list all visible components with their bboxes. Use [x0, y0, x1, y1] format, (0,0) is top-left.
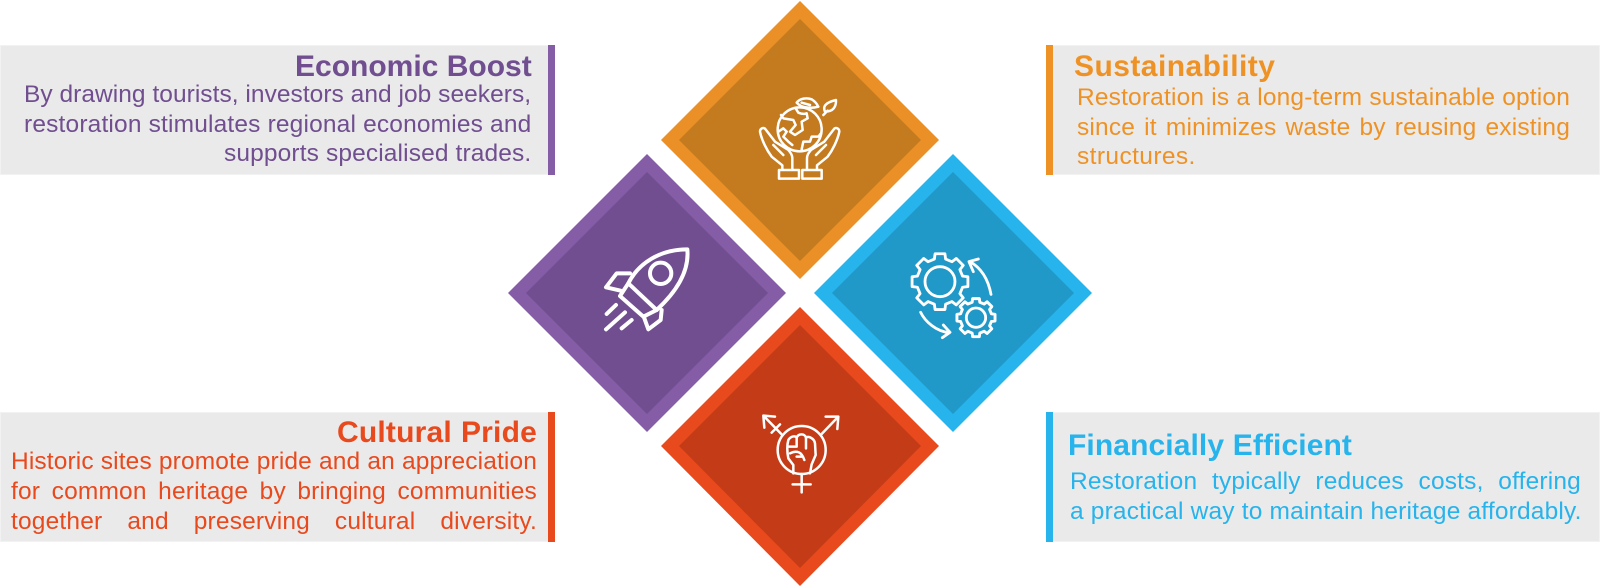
- text block: sustainability: [1077, 84, 1570, 170]
- panel: cultural pride: [0, 412, 555, 542]
- text block: cultural pride: [11, 448, 537, 535]
- heading: sustainability: Sustainability: [1074, 50, 1275, 83]
- accent bar: sustainability: [1046, 45, 1053, 175]
- text block: sustainability: since it minimizes waste by reusing existing: [1077, 114, 1570, 141]
- icon: rocket: [606, 249, 688, 329]
- text block: financially efficient: Restoration typically reduces costs, offering: [1070, 468, 1581, 495]
- accent bar: cultural pride: [548, 412, 555, 542]
- text block: sustainability: structures.: [1077, 143, 1196, 170]
- text block: economic boost: By drawing tourists, investors and job seekers,: [24, 81, 531, 108]
- icon: raised fist in gender symbol: [763, 416, 838, 492]
- text block: cultural pride: for common heritage by bringing communities: [11, 478, 537, 505]
- accent bar: economic boost: [548, 45, 555, 175]
- text block: financially efficient: a practical way to maintain heritage affordably.: [1070, 498, 1582, 525]
- diamond: cultural pride: [661, 307, 939, 586]
- diamond: financially efficient: [814, 154, 1092, 432]
- heading: financially efficient: Financially Efficient: [1068, 429, 1352, 462]
- text block: cultural pride: together and preserving cultural diversity.: [11, 508, 537, 535]
- icon: hands holding globe: [760, 98, 839, 179]
- heading: economic boost: Economic Boost: [295, 50, 532, 83]
- diamond: economic boost: [508, 154, 786, 432]
- panel: financially efficient: [1046, 412, 1600, 542]
- icon: gears with arrows: [912, 254, 995, 338]
- diamond: sustainability: [661, 1, 939, 279]
- panel: sustainability: [1046, 45, 1600, 175]
- text block: economic boost: [24, 81, 531, 167]
- heading: cultural pride: Cultural Pride: [337, 416, 537, 449]
- text block: financially efficient: [1070, 468, 1582, 525]
- panel: economic boost: [0, 45, 555, 175]
- text block: cultural pride: Historic sites promote pride and an appreciation: [11, 448, 537, 475]
- text block: economic boost: restoration stimulates regional economies and: [24, 111, 531, 138]
- text block: sustainability: Restoration is a long-term sustainable option: [1077, 84, 1570, 111]
- accent bar: financially efficient: [1046, 412, 1053, 542]
- text block: economic boost: supports specialised trades.: [224, 140, 531, 167]
